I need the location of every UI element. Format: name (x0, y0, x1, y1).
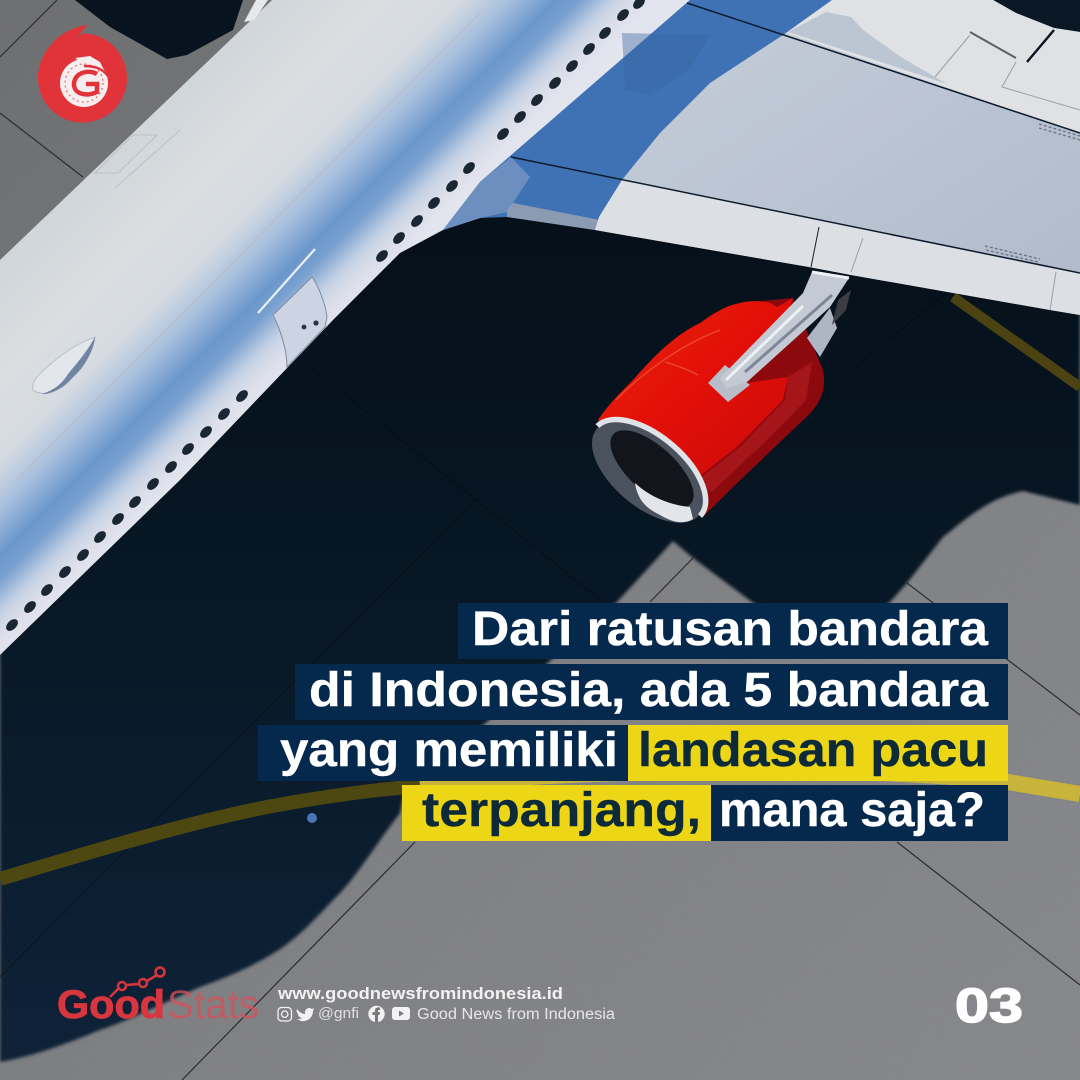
yellow line in shadow (0, 297, 1080, 879)
engine shaded lower cowl (598, 298, 824, 517)
icon: facebook (368, 1006, 385, 1023)
headline line 3 (258, 724, 1008, 781)
GoodStats logo (57, 968, 259, 1027)
engine pylon patch (708, 365, 750, 402)
engine stripe (695, 362, 812, 492)
fuselage (0, 0, 690, 655)
yellow runway line on concrete (400, 771, 1080, 794)
wing (443, 0, 1080, 315)
windows upper row (374, 0, 647, 264)
headline line 4 (402, 784, 1008, 841)
headline line 4: terpanjang, (422, 784, 701, 837)
engine right patch (807, 308, 837, 357)
small white fitting at top (244, 0, 268, 22)
fuselage panel lines (17, 13, 480, 480)
website url: www.goodnewsfromindonesia.id (277, 984, 563, 1003)
small blue dot on ground (307, 813, 317, 823)
icon: twitter (297, 1008, 314, 1021)
red engine (574, 272, 851, 542)
engine pylon (720, 272, 849, 388)
engine inlet (574, 402, 722, 542)
GoodStats logo: Stats (167, 983, 259, 1027)
headline line 1: Dari ratusan bandara (472, 603, 988, 656)
engine highlights (616, 330, 720, 400)
wing leading panel (595, 180, 1080, 315)
headline banner (258, 603, 1008, 841)
page number: 03 (955, 980, 1023, 1033)
logo: GNFI red swirl (38, 25, 127, 122)
wing flap shadow (788, 12, 947, 84)
wing flap detail lines (811, 30, 1080, 310)
icon: youtube (392, 1007, 410, 1020)
white reflection slash (258, 249, 315, 313)
windows lower row (4, 388, 250, 633)
wing root blue section (443, 0, 832, 230)
headline line 4: mana saja? (719, 784, 985, 837)
headline line 3: landasan pacu (638, 724, 988, 777)
door hatch (273, 277, 327, 367)
GoodStats logo: Good (57, 983, 165, 1027)
wing main surface (595, 0, 1080, 315)
headline line 2: di Indonesia, ada 5 bandara (309, 664, 988, 717)
engine bright cowl (598, 298, 793, 482)
wing black seam lines (511, 3, 1080, 273)
fuselage antenna (33, 337, 95, 394)
facebook page name: Good News from Indonesia (417, 1006, 615, 1023)
social media row (278, 1006, 615, 1023)
wing flap panel (786, 0, 1080, 133)
headline line 3: yang memiliki (280, 724, 618, 777)
social handle: @gnfi (318, 1006, 359, 1022)
icon: instagram (278, 1008, 292, 1021)
